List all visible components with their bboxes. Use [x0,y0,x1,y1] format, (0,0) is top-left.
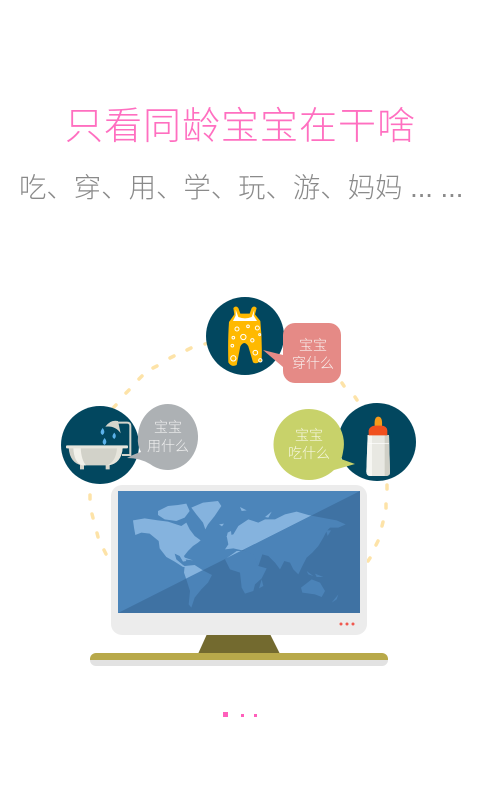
circle: food [338,403,416,481]
speech bubble: bath [127,404,198,470]
map: dark half [186,516,346,608]
panel: clothes item: 穿什么 [292,355,334,371]
panel: food item: 吃什么 [288,445,330,461]
monitor body [111,485,367,635]
bubble text: 宝宝 [299,337,327,353]
icon: baby bottle [366,417,390,476]
speech bubble: clothes [263,323,341,383]
dotted arc [90,343,387,561]
panel: bath item: 用什么 [147,438,189,454]
monitor base [90,653,388,666]
circle: bath [61,406,139,484]
screen with world map [118,491,360,613]
panel: clothes item [206,297,341,383]
monitor stand [198,634,280,654]
subtitle: 吃、穿、用、学、玩、游、妈妈 ... ... [19,172,463,203]
bubble text: 宝宝 [154,419,182,435]
pagination dots [223,712,257,717]
map: light half [133,501,311,578]
bubble text: 宝宝 [295,427,323,443]
title: 只看同龄宝宝在干啥 [65,106,415,148]
speech bubble: food [274,409,355,480]
icon: bathtub and shower [66,421,130,469]
panel: bath item [61,404,198,484]
icon: baby romper [228,306,262,366]
panel: food item [274,403,416,481]
indicator lights [340,622,354,626]
circle: clothes [206,297,284,375]
panel: monitor [90,485,388,666]
